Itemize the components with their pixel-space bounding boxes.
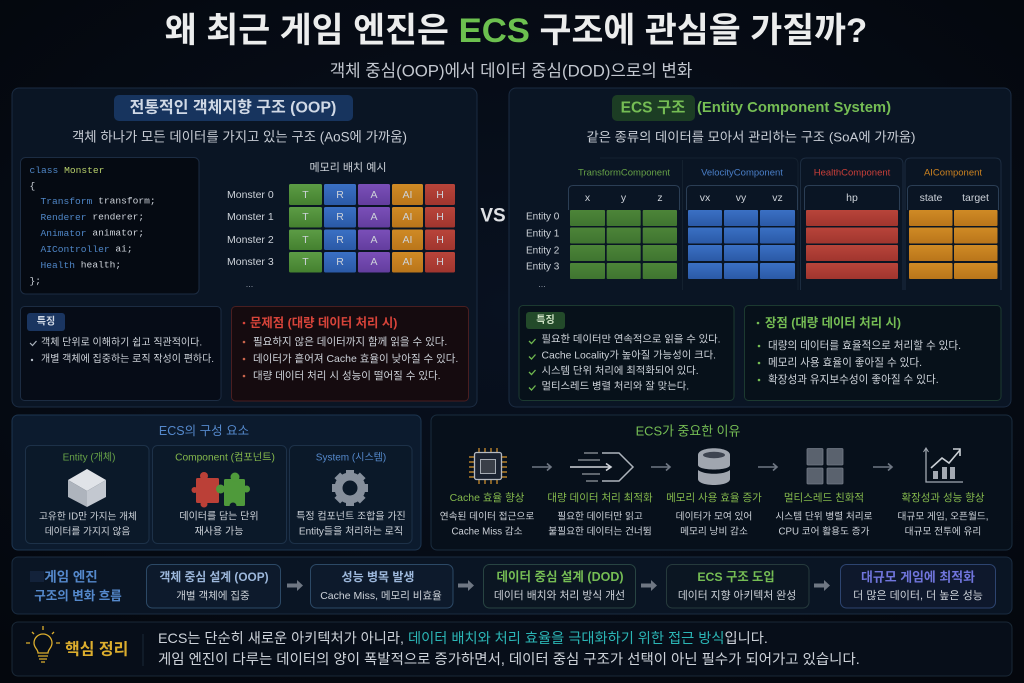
ECS features box: 필요한 데이터만 연속적으로 읽을 수 있다.	[542, 332, 721, 346]
arrow	[814, 580, 830, 591]
step: OOP: 객체 중심 설계 (OOP)	[159, 570, 269, 584]
ECS features box: 특징	[536, 314, 555, 326]
heading: ECS: ECS 구조	[621, 100, 685, 116]
memory layout chart: AI	[403, 256, 412, 268]
component data table: AIComponent	[924, 168, 982, 178]
item: scalability: 확장성과 성능 향상	[901, 491, 985, 504]
card: Component: Component (컴포넌트)	[175, 452, 275, 464]
memory layout chart: A	[370, 211, 378, 223]
card: Component: 데이터를 담는 단위	[179, 510, 259, 522]
step: ECS	[666, 564, 809, 608]
ECS features box	[519, 306, 734, 400]
code block: class Monster: Renderer renderer;	[40, 212, 144, 222]
heading: ECS	[612, 95, 891, 121]
card: System: 특정 컴포넌트 조합을 가진	[296, 510, 406, 522]
OOP problems box	[232, 306, 468, 401]
component data table: Entity 2	[526, 246, 560, 256]
summary text: 게임 엔진이 다루는 데이터의 양이 폭발적으로 증가하면서, 데이터 중심 구조가 선택이 아닌 필수가 되어가고 있습니다.	[158, 651, 860, 668]
components heading: ECS의 구성 요소	[159, 424, 249, 438]
component data table: vx	[700, 192, 711, 204]
ECS advantages box: 대량의 데이터를 효율적으로 처리할 수 있다.	[768, 340, 961, 352]
step: large games	[840, 564, 996, 608]
step: DOD: 데이터 배치와 처리 방식 개선	[494, 589, 625, 602]
ECS features box: 멀티스레드 병렬 처리와 잘 맞는다.	[542, 380, 689, 392]
memory layout chart: AI	[403, 234, 412, 246]
memory layout chart: Monster 2	[227, 234, 274, 246]
VS label: VS	[480, 206, 506, 226]
subtitle: 객체 중심(OOP)에서 데이터 중심(DOD)으로의 변화	[330, 62, 692, 80]
item: cache efficiency: Cache Miss 감소	[451, 526, 523, 538]
item: scalability: 대규모 전투에 유리	[905, 526, 981, 538]
code block: class Monster: };	[30, 276, 41, 286]
memory layout chart: T	[302, 234, 309, 246]
card: System: System (시스템)	[316, 452, 386, 464]
memory layout chart: T	[302, 256, 309, 268]
item: multithread friendly	[775, 448, 873, 538]
item: memory efficiency: 메모리 사용 효율 증가	[666, 492, 762, 504]
memory layout chart: R	[336, 256, 344, 268]
icon: chip	[469, 448, 507, 484]
memory layout chart: H	[436, 211, 444, 223]
heading: OOP: 전통적인 객체지향 구조 (OOP)	[130, 98, 336, 116]
ECS advantages box: 확장성과 유지보수성이 좋아질 수 있다.	[768, 373, 939, 386]
card: System: Entity들을 처리하는 로직	[299, 524, 403, 538]
icon: puzzle pieces	[192, 472, 250, 510]
arrow	[532, 464, 551, 470]
memory layout chart: AI	[403, 189, 412, 201]
OOP problems box: 문제점 (대량 데이터 처리 시)	[250, 315, 397, 330]
item: multithread friendly: 멀티스레드 친화적	[784, 491, 864, 504]
arrow	[287, 580, 303, 591]
OOP problems box: 대량 데이터 처리 시 성능이 떨어질 수 있다.	[253, 370, 441, 382]
item: multithread friendly: CPU 코어 활용도 증가	[779, 524, 870, 538]
memory layout chart: A	[370, 189, 378, 201]
memory layout chart: H	[436, 234, 444, 246]
code block: class Monster: Animator animator;	[40, 228, 144, 238]
component data table: vy	[736, 192, 747, 204]
icon: grid	[807, 448, 843, 484]
OOP description: 객체 하나가 모든 데이터를 가지고 있는 구조 (AoS에 가까움)	[72, 130, 407, 144]
ECS advantages box: 메모리 사용 효율이 좋아질 수 있다.	[768, 357, 922, 369]
memory layout chart: R	[336, 234, 344, 246]
OOP features box: 객체 단위로 이해하기 쉽고 직관적이다.	[41, 336, 202, 348]
memory layout chart: 메모리 배치 예시	[310, 161, 386, 174]
memory layout chart: A	[370, 234, 378, 246]
component data table: target	[962, 192, 989, 204]
item: memory efficiency	[666, 448, 762, 538]
ECS features box: Cache Locality가 높아질 가능성이 크다.	[542, 350, 716, 362]
heading: OOP	[114, 95, 353, 121]
code block: class Monster: AIController ai;	[40, 244, 133, 254]
memory layout chart: H	[436, 256, 444, 268]
ECS advantages box: 장점 (대량 데이터 처리 시)	[765, 316, 901, 330]
why heading: ECS가 중요한 이유	[636, 424, 741, 438]
step: large games: 더 많은 데이터, 더 높은 성능	[853, 589, 983, 602]
panel: key summary	[12, 622, 1012, 676]
icon: cube	[68, 469, 106, 507]
OOP features box	[20, 306, 221, 400]
item: bulk data processing	[547, 453, 653, 538]
step: ECS: 데이터 지향 아키텍처 완성	[678, 589, 796, 602]
card: Entity: 데이터를 가지지 않음	[45, 526, 130, 538]
item: bulk data processing: 필요한 데이터만 읽고	[557, 510, 643, 522]
component data table: HealthComponent	[814, 168, 891, 178]
step: OOP: 개별 객체에 집중	[176, 590, 250, 602]
memory layout chart: ...	[246, 279, 253, 289]
code block: class Monster: Health health;	[40, 260, 121, 270]
icon: fast arrow	[570, 453, 633, 481]
arrow	[758, 464, 777, 470]
step: OOP	[146, 564, 280, 608]
memory layout chart: AI	[403, 211, 412, 223]
memory layout chart: Monster 1	[227, 211, 274, 223]
component data table: Entity 0	[526, 212, 560, 222]
component data table	[526, 158, 1001, 290]
flow heading	[30, 570, 122, 603]
title: 왜 최근 게임 엔진은 ECS 구조에 관심을 가질까?	[165, 11, 867, 50]
icon: light bulb	[26, 626, 60, 662]
item: bulk data processing: 불필요한 데이터는 건너뜀	[548, 526, 652, 538]
component data table: z	[657, 192, 663, 204]
memory layout chart: H	[436, 189, 444, 201]
item: scalability: 대규모 게임, 오픈월드,	[898, 510, 988, 522]
memory layout chart: R	[336, 189, 344, 201]
OOP features box: 특징	[37, 316, 55, 328]
item: bulk data processing: 대량 데이터 처리 최적화	[547, 492, 653, 504]
component data table: ...	[538, 279, 546, 289]
panel: evolution flow	[12, 557, 1012, 614]
item: multithread friendly: 시스템 단위 병렬 처리로	[775, 510, 873, 522]
panel: why ECS matters	[431, 415, 1012, 550]
card: Entity: Entity (개체)	[63, 452, 115, 464]
summary text: ECS는 단순히 새로운 아키텍처가 아니라, 데이터 배치와 처리 효율을 극대화하기 위한 접근 방식입니다.	[158, 630, 768, 647]
card: System	[290, 446, 412, 544]
arrow	[873, 464, 892, 470]
item: cache efficiency: 연속된 데이터 접근으로	[440, 510, 534, 522]
item: memory efficiency: 데이터가 모여 있어	[676, 510, 752, 522]
component data table: state	[920, 192, 943, 204]
ECS advantages box	[744, 306, 1001, 400]
item: scalability	[898, 448, 988, 538]
panel: ECS components	[12, 415, 421, 550]
ECS description: 같은 종류의 데이터를 모아서 관리하는 구조 (SoA에 가까움)	[587, 130, 915, 144]
code block: class Monster: Transform transform;	[40, 196, 156, 206]
summary text	[158, 630, 860, 668]
OOP problems box: 필요하지 않은 데이터까지 함께 읽을 수 있다.	[253, 335, 447, 348]
step: DOD: 데이터 중심 설계 (DOD)	[496, 570, 624, 584]
panel: OOP structure	[12, 88, 477, 407]
item: cache efficiency	[440, 448, 534, 538]
step: bottleneck: Cache Miss, 메모리 비효율	[320, 590, 442, 602]
flow heading: 게임 엔진	[44, 570, 98, 584]
arrow	[458, 580, 474, 591]
icon: database	[698, 448, 730, 485]
step: bottleneck: 성능 병목 발생	[342, 570, 414, 584]
item: cache efficiency: Cache 효율 향상	[450, 492, 525, 504]
icon: growth chart	[924, 448, 963, 482]
memory layout chart: R	[336, 211, 344, 223]
step: large games: 대규모 게임에 최적화	[861, 570, 975, 584]
component data table: Entity 1	[526, 228, 560, 240]
code block: class Monster	[20, 158, 199, 294]
card: Entity: 고유한 ID만 가지는 개체	[39, 510, 137, 522]
panel: ECS structure	[509, 88, 1011, 407]
arrow	[651, 464, 670, 470]
card: Component	[152, 446, 286, 544]
OOP features box: 개별 객체에 집중하는 로직 작성이 편하다.	[41, 352, 214, 365]
component data table: VelocityComponent	[701, 168, 783, 178]
memory layout chart: Monster 0	[227, 189, 274, 201]
step: DOD	[484, 564, 636, 608]
ECS features box: 시스템 단위 처리에 최적화되어 있다.	[542, 364, 699, 377]
component data table: hp	[846, 192, 858, 204]
memory layout chart: A	[370, 256, 378, 268]
arrow	[641, 580, 657, 591]
code block: class Monster: {	[30, 180, 35, 192]
summary label: 핵심 정리	[65, 640, 128, 658]
flow heading: 구조의 변화 흐름	[34, 588, 122, 603]
OOP problems box: 데이터가 흩어져 Cache 효율이 낮아질 수 있다.	[253, 352, 458, 365]
memory layout chart: Monster 3	[227, 256, 274, 268]
code block: class Monster: class Monster	[30, 164, 104, 176]
component data table: x	[585, 192, 591, 204]
icon: gear	[332, 470, 368, 506]
memory layout chart: T	[302, 211, 309, 223]
component data table: TransformComponent	[578, 168, 670, 178]
step: bottleneck	[310, 564, 453, 608]
step: ECS: ECS 구조 도입	[697, 570, 775, 584]
component data table: vz	[772, 192, 783, 204]
heading: ECS: (Entity Component System)	[697, 100, 891, 116]
component data table: y	[621, 192, 627, 204]
memory layout chart: T	[302, 189, 309, 201]
memory layout chart	[227, 161, 455, 289]
card: Entity	[26, 446, 149, 544]
card: Component: 재사용 가능	[195, 526, 243, 538]
item: memory efficiency: 메모리 낭비 감소	[680, 526, 748, 538]
component data table: Entity 3	[526, 262, 560, 272]
